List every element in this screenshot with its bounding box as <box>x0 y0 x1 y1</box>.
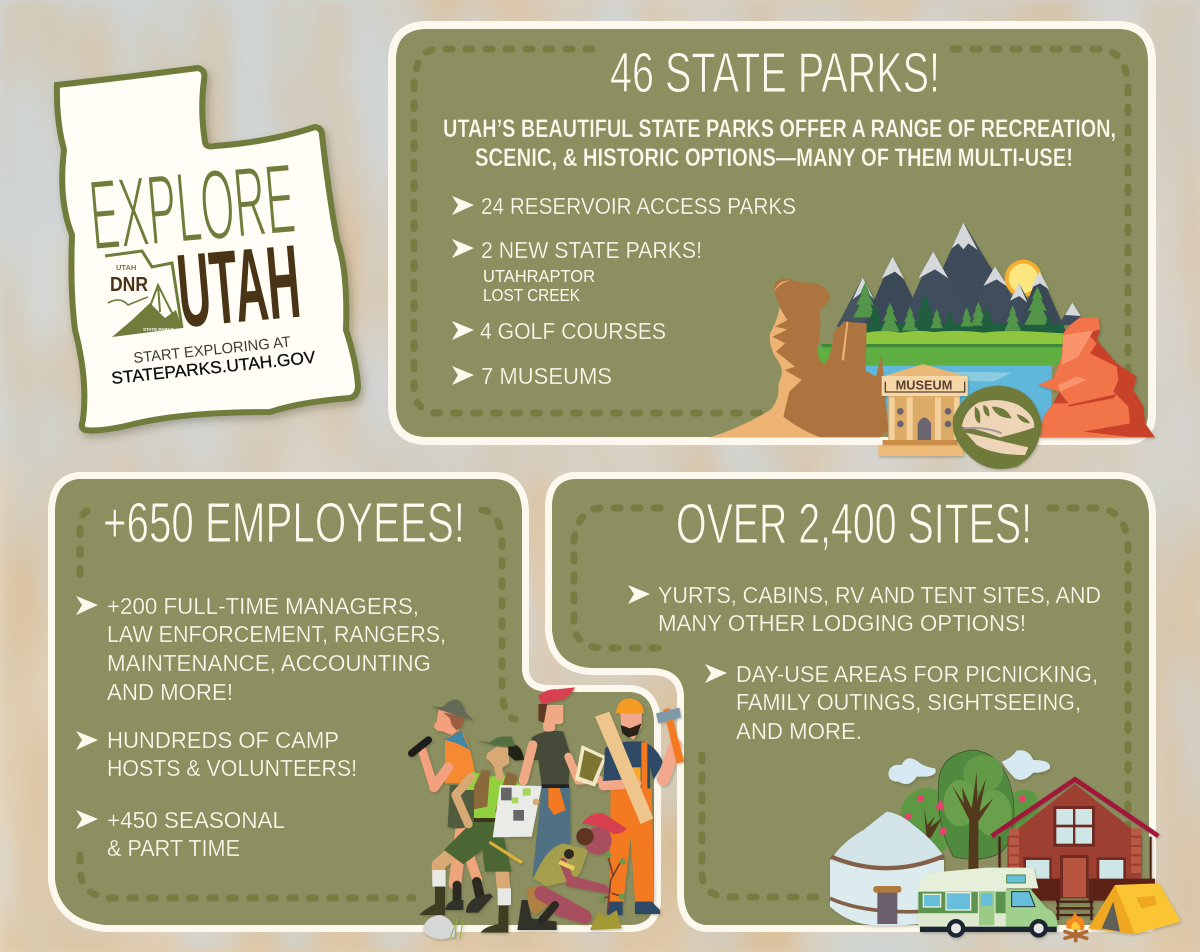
icon: clouds <box>888 750 1050 784</box>
dashed trail: employees panel <box>80 510 515 898</box>
list: hosts and volunteers: HUNDREDS OF CAMP <box>107 727 339 753</box>
icon: mountains <box>837 223 1085 333</box>
list: hosts and volunteers: HOSTS & VOLUNTEERS! <box>107 755 357 781</box>
list: seasonal staff <box>76 807 285 861</box>
logo: Utah state sign <box>57 68 358 430</box>
icon: scout with binoculars <box>412 700 493 913</box>
icon: forest <box>822 282 1063 347</box>
logo: Utah DNR state parks badge: DNR <box>110 274 148 296</box>
heading: +650 employees: +650 EMPLOYEES! <box>103 491 465 555</box>
illustration: parks landscape <box>710 223 1155 469</box>
list: day use: FAMILY OUTINGS, SIGHTSEEING, <box>736 689 1081 715</box>
icon: lake and shore <box>817 347 1063 426</box>
list: park types: 7 MUSEUMS <box>481 363 612 389</box>
icon: red rock formation <box>1038 317 1155 437</box>
panel: +650 employees <box>55 479 684 939</box>
icon: museum: MUSEUM <box>896 379 952 393</box>
icon: museum <box>878 364 968 456</box>
icon: boulder and grass <box>423 915 463 939</box>
logo: Utah state sign: UTAH <box>173 224 305 350</box>
logo: Utah DNR state parks badge: UTAH <box>116 263 136 272</box>
intro text <box>443 115 1116 172</box>
intro text: SCENIC, & HISTORIC OPTIONS—MANY OF THEM MULTI-USE! <box>475 144 1073 172</box>
dashed trail: state parks panel <box>414 49 1128 413</box>
list: park types <box>452 193 796 389</box>
icon: brown rock formation <box>710 278 888 437</box>
list: day use: AND MORE. <box>736 718 862 744</box>
logo: Utah state sign: EXPLORE <box>85 142 299 272</box>
icon: yellow tent <box>1088 883 1181 934</box>
list: lodging: MANY OTHER LODGING OPTIONS! <box>658 610 1026 636</box>
list: day use <box>705 661 1098 744</box>
logo: Utah DNR state parks badge <box>105 251 182 337</box>
list: lodging: YURTS, CABINS, RV AND TENT SITES, AND <box>658 582 1101 608</box>
list: seasonal staff: +450 SEASONAL <box>107 807 285 833</box>
dashed trail: sites panel <box>574 508 1128 897</box>
list: park types: 2 NEW STATE PARKS! <box>481 237 702 263</box>
logo: Utah DNR state parks badge: STATE PARKS <box>143 327 174 332</box>
list: full-time staff: +200 FULL-TIME MANAGERS, <box>107 593 419 619</box>
list: full-time staff: AND MORE! <box>107 679 233 705</box>
icon: trees <box>901 750 1039 870</box>
list: seasonal staff: & PART TIME <box>107 835 240 861</box>
list: full-time staff: LAW ENFORCEMENT, RANGERS, <box>107 621 446 647</box>
list: park types: 4 GOLF COURSES <box>480 318 666 344</box>
icon: log cabin <box>992 779 1158 920</box>
illustration: lodging scene <box>830 750 1181 941</box>
icon: ranger with map <box>419 736 542 933</box>
panel: over 2,400 sites <box>552 479 1181 941</box>
icon: ranger with red cap <box>523 687 607 880</box>
text: start exploring: START EXPLORING AT <box>133 334 292 367</box>
icon: RV camper <box>918 868 1057 938</box>
list: park types: UTAHRAPTOR <box>483 266 595 286</box>
panel: 46 state parks <box>396 29 1155 469</box>
heading: 46 state parks: 46 STATE PARKS! <box>610 41 940 105</box>
illustration: park staff <box>412 687 684 939</box>
icon: yurt <box>830 812 944 926</box>
list: park types: 24 RESERVOIR ACCESS PARKS <box>481 193 796 219</box>
list: full-time staff: MAINTENANCE, ACCOUNTING <box>107 650 431 676</box>
icon: dinosaur fossil badge <box>953 386 1042 469</box>
icon: campfire <box>1065 912 1087 941</box>
text: start exploring: STATEPARKS.UTAH.GOV <box>110 348 317 388</box>
icon: kneeling ranger planting <box>517 813 627 930</box>
list: lodging <box>628 582 1101 636</box>
list: day use: DAY-USE AREAS FOR PICNICKING, <box>736 661 1098 687</box>
list: full-time staff <box>76 593 446 705</box>
list: park types: LOST CREEK <box>483 285 580 305</box>
list: hosts and volunteers <box>76 727 357 781</box>
heading: over 2,400 sites: OVER 2,400 SITES! <box>676 492 1032 556</box>
icon: builder with plank <box>595 698 684 915</box>
